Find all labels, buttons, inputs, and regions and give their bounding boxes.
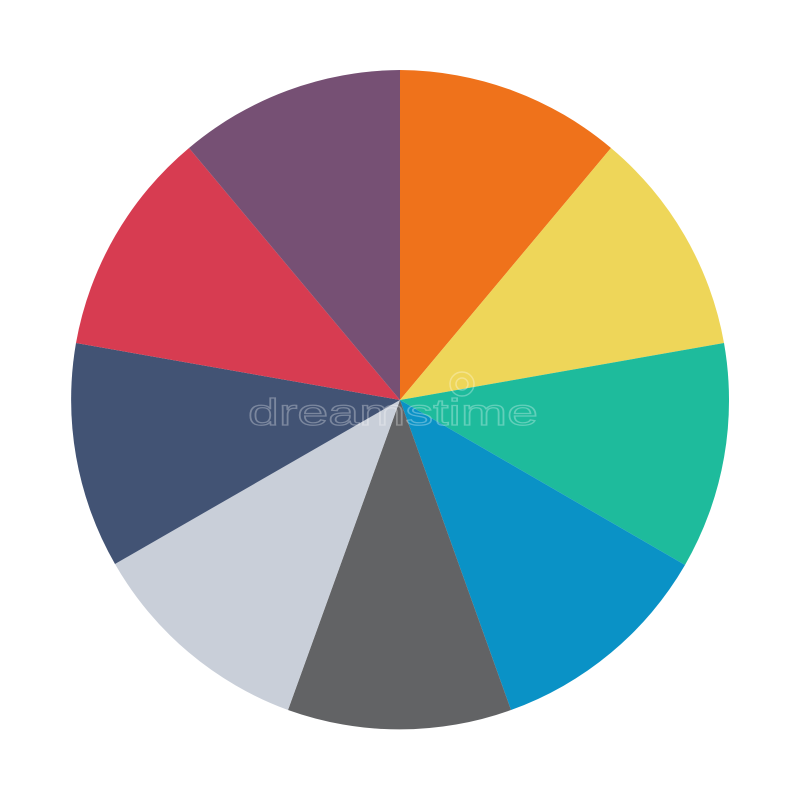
watermark icon — [450, 372, 474, 396]
slice: navy — [71, 343, 400, 564]
watermark text: dreamstime — [248, 392, 538, 433]
watermark — [248, 372, 538, 433]
slice: light gray — [115, 400, 400, 710]
slice: purple — [189, 70, 400, 400]
slice: dark gray — [288, 400, 511, 729]
slice: red — [76, 148, 400, 400]
slice: orange — [400, 70, 611, 400]
slice: blue — [400, 400, 685, 710]
slice: yellow — [400, 148, 724, 400]
slice: teal — [400, 343, 729, 565]
